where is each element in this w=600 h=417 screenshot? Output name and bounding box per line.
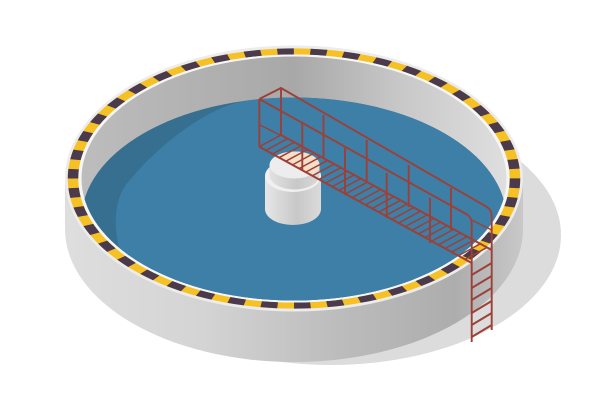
tank rim [65, 46, 523, 312]
deck ribs [259, 135, 487, 259]
inner tank wall [82, 56, 506, 300]
ground shadow [101, 105, 561, 365]
back railing [259, 88, 492, 330]
white inner lip [78, 54, 510, 302]
lit water [116, 98, 504, 300]
bridge walkway [259, 88, 492, 342]
central pedestal [265, 152, 321, 225]
water surface [84, 98, 504, 300]
railing end braces [260, 125, 492, 230]
illustration: circular water clarifier tank [65, 46, 561, 365]
outer tank wall [65, 178, 523, 362]
ladder rungs [472, 263, 492, 337]
shaded water [84, 98, 504, 300]
front railing [259, 99, 472, 342]
deck edges [259, 135, 492, 263]
pedestal lower cylinder [265, 176, 321, 225]
cream patch under deck [277, 152, 320, 174]
pedestal upper cylinder [270, 165, 320, 190]
hazard stripe band [73, 51, 515, 306]
pedestal top cap [270, 152, 320, 178]
